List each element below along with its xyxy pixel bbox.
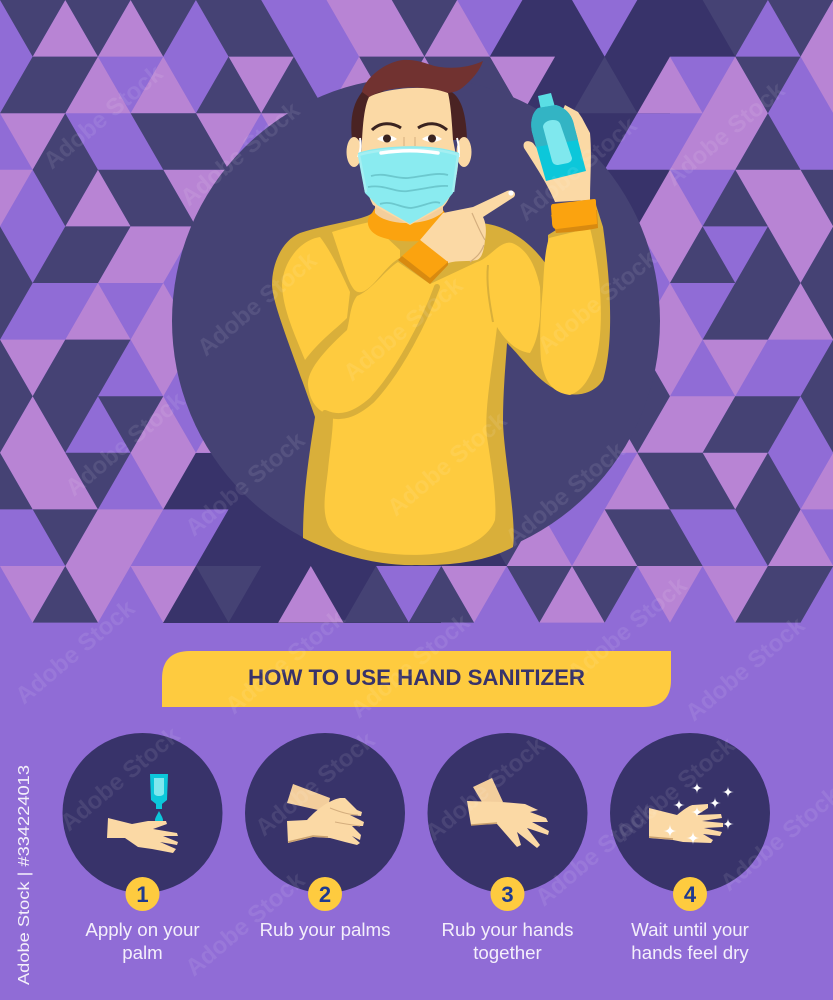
illustration: man with mask holding sanitizer bottle [272,60,610,565]
stock watermarks: Adobe Stock [10,594,141,710]
stock watermarks: Adobe Stock [180,866,311,982]
stock watermarks: Adobe Stock [220,604,351,720]
sweater: torso and forearm [308,243,540,555]
stock watermarks: Adobe Stock [338,271,469,387]
hair back [351,90,467,140]
face [362,88,458,225]
step 3 number: 3 [501,882,514,907]
step 4 badge [673,877,707,911]
stock watermarks: Adobe Stock [60,386,191,502]
step 1 circle [62,733,222,893]
step 1 badge [126,877,160,911]
step 3 badge [490,877,524,911]
stock watermarks: Adobe Stock [175,96,306,212]
step 3 circle [428,733,588,893]
neck [375,195,443,223]
stock watermarks: Adobe Stock [530,796,661,912]
stock watermarks: Adobe Stock [192,246,323,362]
icon: clean hands with sparkles [649,782,734,845]
step 3: rub your hands together [428,733,588,963]
step 4 caption: hands feel dry [631,942,749,963]
stock watermarks: Adobe Stock [532,244,663,360]
step 1 caption: palm [122,942,163,963]
sweater collar [368,208,447,241]
right cuff [551,199,598,233]
ears [346,137,362,167]
step 3 caption: together [473,942,542,963]
side credit text: Adobe Stock | #334224013 [16,765,33,985]
icon: sanitizer bottle [531,93,586,181]
step 2 badge [308,877,342,911]
title text: HOW TO USE HAND SANITIZER [248,665,585,690]
icon: hand under bottle [107,774,178,853]
stock watermarks: Adobe Stock [55,721,186,837]
stock watermarks: Adobe Stock [250,726,381,842]
step 4 caption: Wait until your [631,919,749,940]
stock watermarks: Adobe Stock [345,608,476,724]
stock watermarks: Adobe Stock [500,436,631,552]
sweater: chest left [332,222,400,292]
stock watermarks: Adobe Stock [660,76,791,192]
forearm fold shadow [325,287,437,416]
triangle mosaic background [0,0,833,623]
icon: hands rubbing [467,778,549,848]
step 1 caption: Apply on your [85,919,200,940]
sweater: right sleeve [540,228,601,395]
left cuff [398,240,448,284]
step 3 caption: Rub your hands [442,919,573,940]
title banner [162,651,671,707]
step 4 number: 4 [684,882,697,907]
stock watermarks: Adobe Stock [610,731,741,847]
eyes and brows [372,124,447,146]
sweater: left upper arm [282,237,350,360]
stock watermarks: Adobe Stock [420,731,551,847]
raised hand [524,105,591,202]
stock watermarks: Adobe Stock [38,59,169,175]
stock watermarks: Adobe Stock [512,111,643,227]
stock watermarks: Adobe Stock [680,611,811,727]
step 2 caption: Rub your palms [260,919,390,940]
chest fold [487,265,493,322]
step 2 number: 2 [319,882,331,907]
body shadow silhouette [272,205,610,565]
hair top [362,60,483,97]
step 4 circle [610,733,770,893]
step 1: apply on your palm [62,733,222,963]
step 2 circle [245,733,405,893]
stock watermarks: Adobe Stock [382,406,513,522]
step 1 number: 1 [136,882,149,907]
surgical mask [358,138,459,224]
stock watermarks: Adobe Stock [562,571,693,687]
step 2: rub your palms [245,733,405,940]
pointing hand [420,190,515,263]
large dark circle behind the man [172,77,660,565]
step 4: wait until dry [610,733,770,963]
stock watermarks: Adobe Stock [180,426,311,542]
head [346,60,483,225]
icon: palms rubbing [287,784,364,845]
